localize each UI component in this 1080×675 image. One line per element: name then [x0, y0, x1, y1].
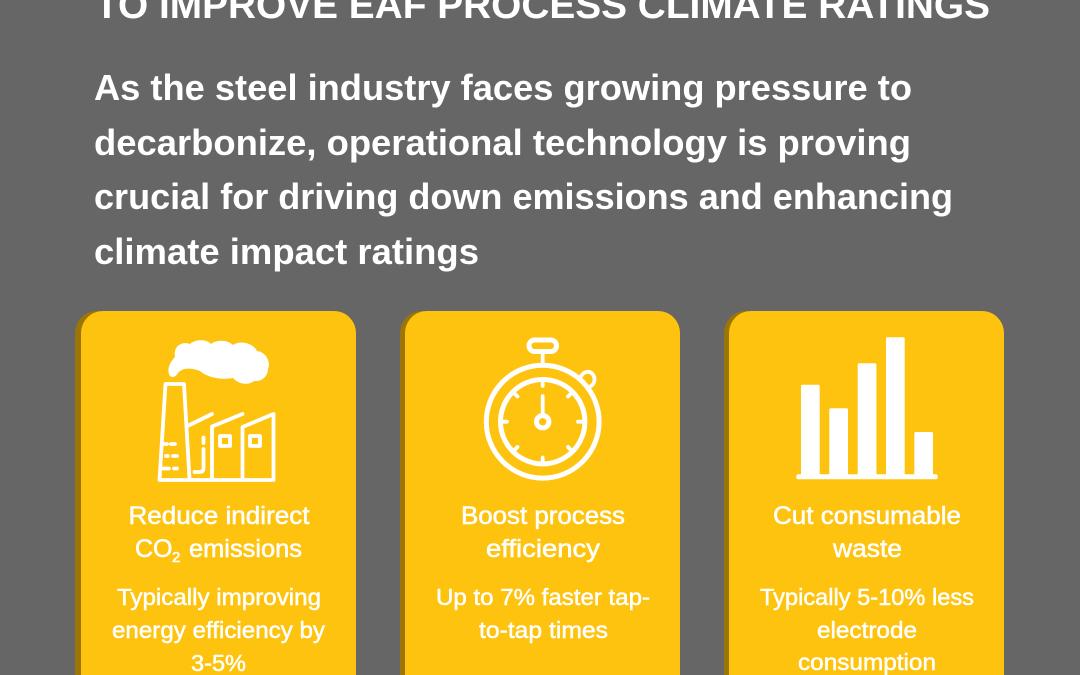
card detail text — [760, 584, 974, 675]
card detail text: electrode — [817, 617, 917, 643]
icon: stopwatch — [486, 340, 599, 478]
card title: Boost process — [461, 502, 625, 530]
card detail text — [436, 584, 650, 643]
card title: Cut consumable — [773, 502, 961, 530]
card title: efficiency — [486, 535, 601, 563]
card detail text: to-tap times — [479, 617, 608, 643]
card title: Reduce indirect — [128, 502, 310, 530]
panel: boost process efficiency — [400, 311, 680, 675]
icon: bar chart — [796, 337, 938, 479]
card detail text: Typically improving — [117, 584, 321, 610]
intro text block: climate impact ratings — [94, 231, 479, 272]
card title: 2 — [172, 549, 180, 566]
card title: waste — [832, 535, 902, 563]
card title — [128, 502, 310, 566]
card detail text: energy efficiency by — [112, 617, 325, 643]
card detail text: consumption — [798, 649, 936, 675]
intro text block — [94, 67, 953, 272]
icon: factory with smoke — [160, 340, 274, 480]
card title — [773, 502, 961, 563]
intro text block: crucial for driving down emissions and enhancing — [94, 176, 953, 217]
card title: CO — [135, 535, 172, 563]
intro text block: As the steel industry faces growing pressure to — [94, 67, 912, 108]
card detail text: Up to 7% faster tap- — [436, 584, 650, 610]
card title — [461, 502, 625, 563]
card detail text: Typically 5-10% less — [760, 584, 974, 610]
panel: cut consumable waste — [724, 311, 1004, 675]
card title: emissions — [189, 535, 302, 563]
panel: reduce indirect CO2 emissions — [75, 311, 356, 675]
card detail text — [112, 584, 325, 675]
intro text block: decarbonize, operational technology is proving — [94, 122, 911, 163]
